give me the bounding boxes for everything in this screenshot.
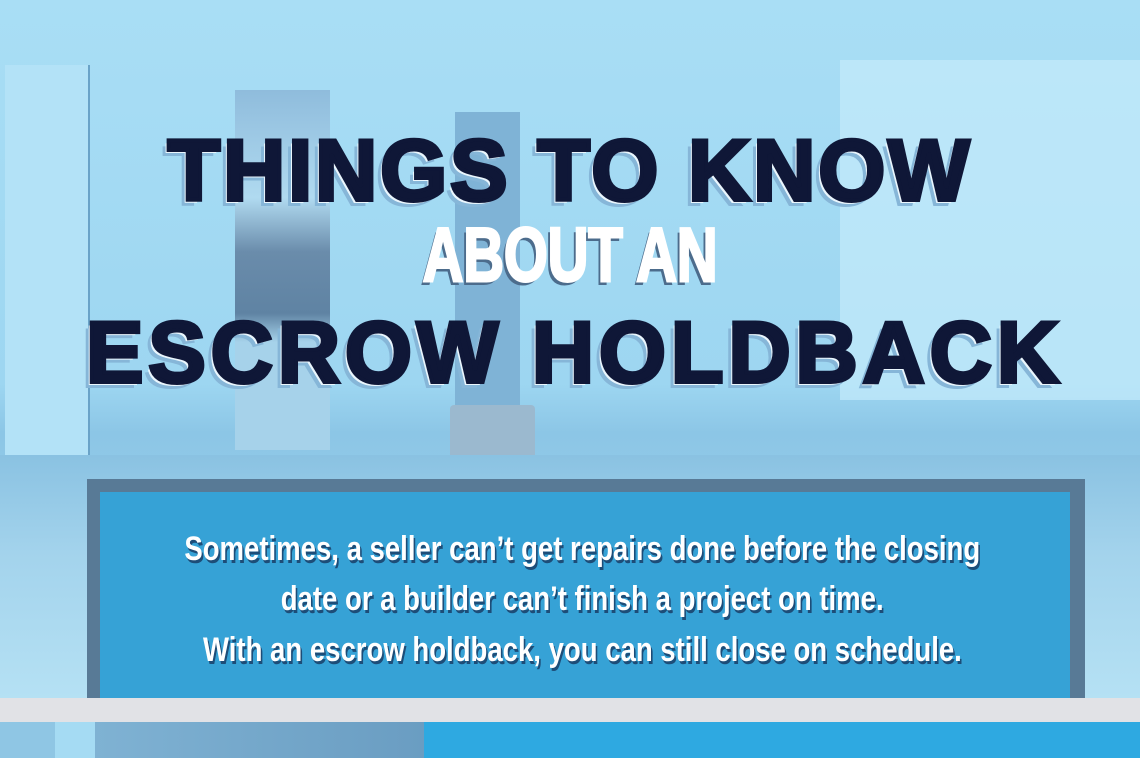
bucket	[450, 405, 535, 460]
intro text	[184, 530, 980, 671]
door	[5, 65, 90, 460]
intro text: With an escrow holdback, you can still close on schedule.	[203, 631, 961, 669]
intro text: Sometimes, a seller can’t get repairs done before the closing	[184, 530, 980, 568]
bottom blue panel	[424, 722, 1140, 758]
divider strip	[0, 698, 1140, 722]
right window	[840, 60, 1140, 400]
intro text: date or a builder can’t finish a project on time.	[281, 580, 883, 618]
title	[86, 123, 1064, 401]
doorway	[455, 112, 520, 442]
bottom photo	[0, 722, 424, 758]
worker figure	[235, 90, 330, 450]
intro box	[87, 479, 1085, 698]
title line 2: ABOUT AN	[423, 213, 717, 298]
title line 1: THINGS TO KNOW	[168, 123, 972, 219]
title line 3: ESCROW HOLDBACK	[86, 305, 1064, 401]
floor	[0, 455, 1140, 698]
intro inner	[100, 492, 1070, 698]
